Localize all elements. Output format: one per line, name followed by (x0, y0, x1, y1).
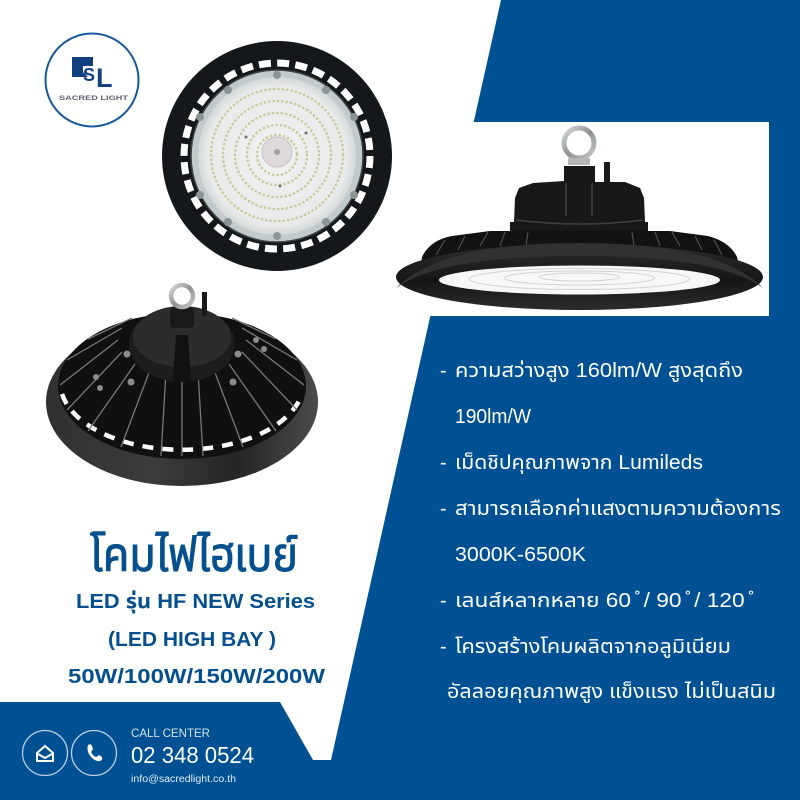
contact label: CALL CENTER (131, 726, 210, 740)
white product photo panel (425, 122, 769, 316)
icon: mail (22, 730, 68, 776)
feature list (440, 359, 781, 704)
email: info@sacredlight.co.th (131, 774, 236, 785)
feature 1 text: ความสว่างสูง 160lm/W สูงสุดถึง (455, 359, 743, 383)
feature 1: - (440, 360, 447, 382)
feature 3 text: สามารถเลือกค่าแสงตามความต้องการ (455, 497, 781, 520)
feature 3: - (440, 498, 447, 520)
feature 1 continued: 190lm/W (455, 406, 531, 428)
product photo: lamp side view (396, 128, 763, 310)
logo: Sacred Light: S (83, 65, 95, 85)
feature 5 continued: อัลลอยคุณภาพสูง แข็งแรง ไม่เป็นสนิม (447, 680, 776, 704)
subtitle: series: LED รุ่น HF NEW Series (76, 591, 315, 613)
title: โคมไฟไฮเบย์ (90, 528, 298, 581)
logo: Sacred Light: SACRED LIGHT (59, 96, 129, 102)
icon: phone (72, 730, 116, 776)
feature 3 continued: 3000K-6500K (455, 544, 587, 566)
feature 5: - (440, 636, 447, 658)
logo: Sacred Light: L (96, 63, 112, 93)
feature 4: - (440, 590, 447, 612)
feature 2 text: เม็ดชิปคุณภาพจาก Lumileds (455, 452, 703, 474)
phone number: 02 348 0524 (131, 742, 254, 768)
subtitle: wattage: 50W/100W/150W/200W (68, 666, 325, 688)
logo: Sacred Light (46, 34, 138, 126)
feature 5 text: โครงสร้างโคมผลิตจากอลูมิเนียม (455, 635, 731, 659)
feature 4 text: เลนส์หลากหลาย 60 ̊ / 90 ̊ / 120 ̊ (455, 590, 753, 612)
product photo: lamp front view (162, 41, 392, 271)
product photo: lamp rear view (46, 285, 318, 486)
feature 2: - (440, 452, 447, 474)
subtitle: led high bay: (LED HIGH BAY ) (108, 629, 276, 651)
